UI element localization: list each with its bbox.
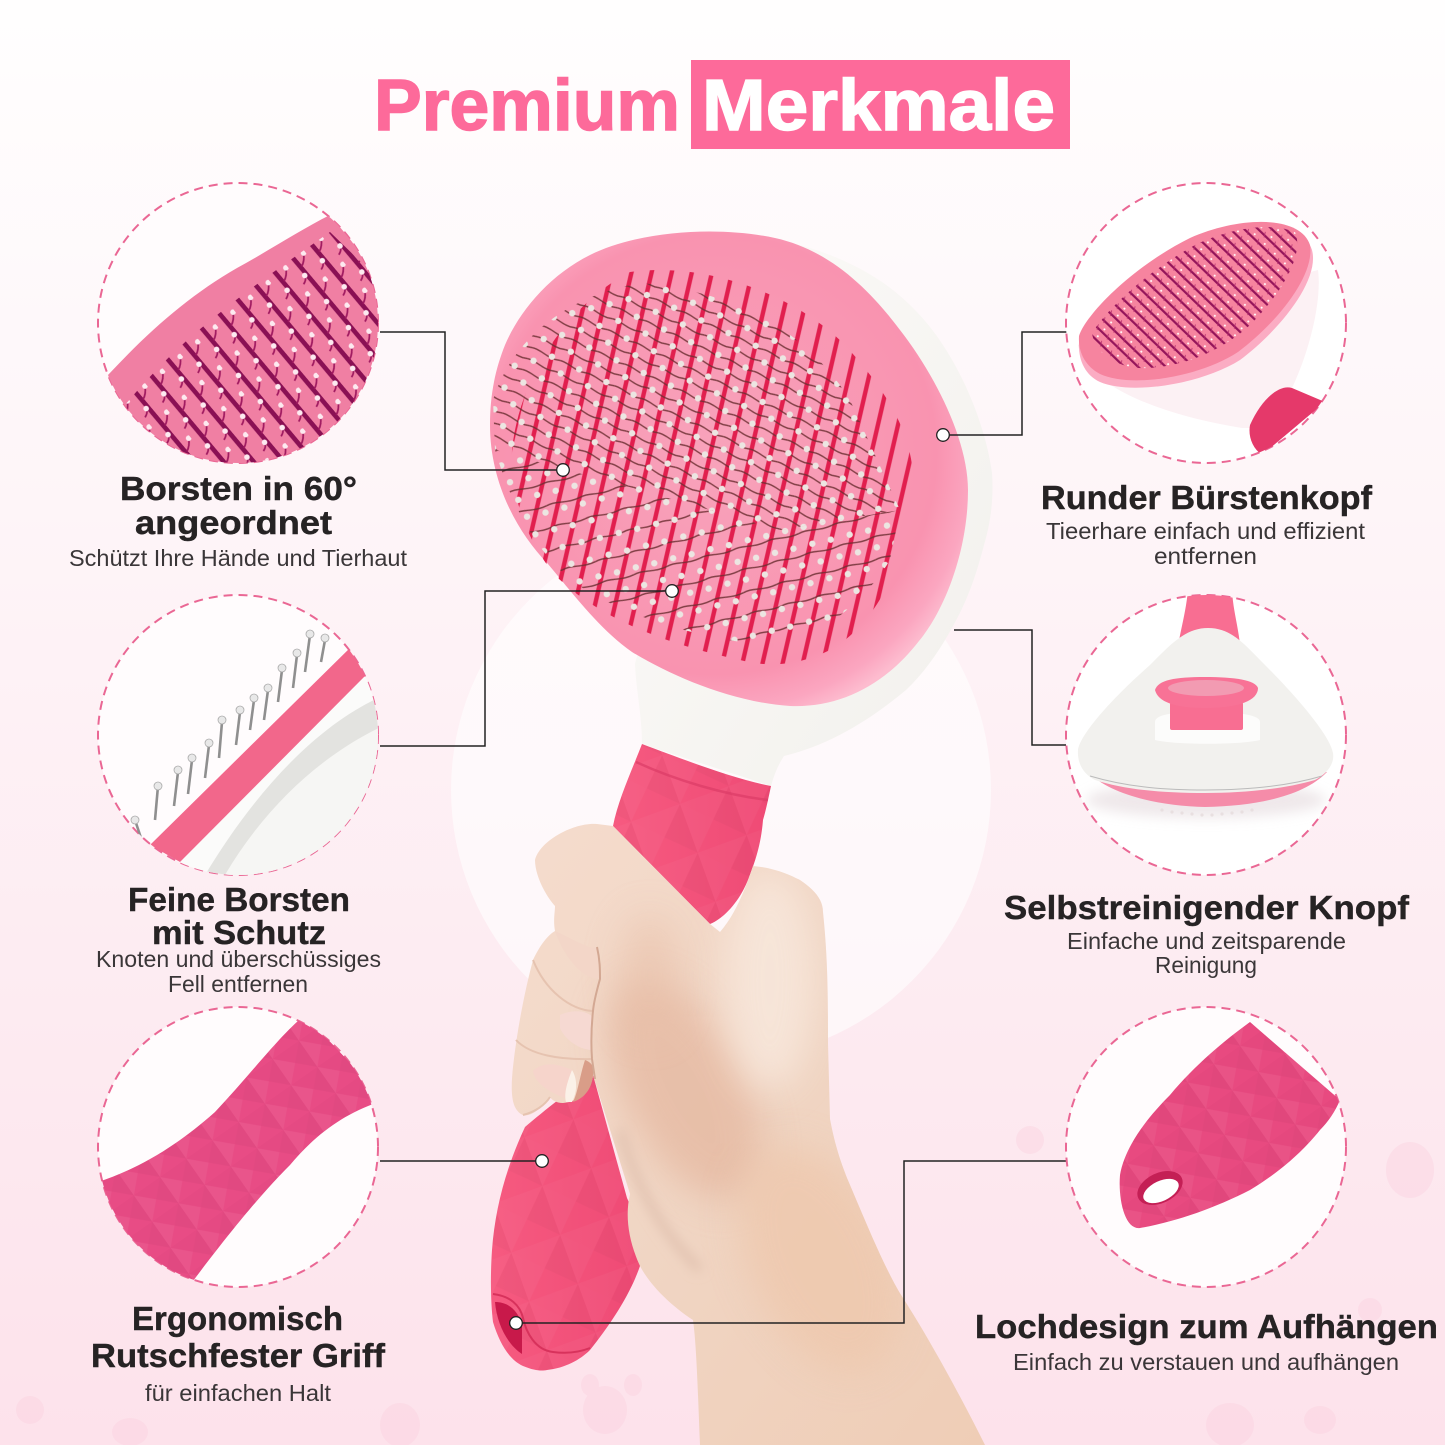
handle end close-up	[1120, 1022, 1340, 1228]
caption: fine bristles: Fell entfernen	[168, 971, 308, 997]
button close-up	[1078, 590, 1333, 818]
caption: round head: Tieerhare einfach und effizient	[1046, 518, 1366, 544]
caption: bristles: Schützt Ihre Hände und Tierhaut	[69, 545, 408, 571]
caption: bristles	[69, 470, 408, 571]
caption: fine bristles: Knoten und überschüssiges	[96, 946, 381, 972]
title	[374, 60, 1070, 149]
paw pattern decorations	[16, 1126, 1434, 1445]
detail circle	[98, 1007, 378, 1287]
connector lines and marker dots	[380, 332, 1086, 1329]
panel: bristles at 60 degrees	[97, 182, 379, 464]
caption: button: Einfache und zeitsparende	[1067, 928, 1346, 954]
red bristle slots	[512, 270, 912, 664]
caption: grip: für einfachen Halt	[145, 1380, 332, 1406]
brush head	[490, 231, 968, 706]
caption: grip: Rutschfester Griff	[91, 1337, 386, 1374]
metal pins lower zone wires	[495, 450, 896, 641]
panel: hanging hole	[1066, 1007, 1346, 1287]
detail circle	[1066, 595, 1346, 875]
caption: grip	[91, 1300, 386, 1406]
bristle close-up	[108, 216, 378, 463]
metal pins lower zone tips	[495, 450, 894, 642]
finger creases and nails	[516, 931, 600, 1115]
caption: round head	[1041, 479, 1373, 569]
caption: fine bristles: mit Schutz	[152, 914, 326, 951]
panel: ergonomic grip	[95, 1007, 385, 1290]
title word: Premium: Premium	[374, 66, 680, 146]
caption: fine bristles: Feine Borsten	[128, 881, 350, 918]
caption: hole	[975, 1308, 1438, 1375]
main product: brush held in hand	[480, 231, 993, 1445]
metal pins upper zone	[493, 284, 898, 530]
detail circle	[1066, 1007, 1346, 1287]
caption: round head: Runder Bürstenkopf	[1041, 479, 1373, 516]
caption: fine bristles	[96, 881, 381, 997]
detail circle	[1066, 183, 1346, 463]
pink collar and upper grip	[613, 744, 771, 924]
caption: grip: Ergonomisch	[132, 1300, 343, 1337]
detail circle	[98, 183, 378, 463]
hand	[512, 824, 985, 1445]
caption: hole: Lochdesign zum Aufhängen	[975, 1308, 1438, 1345]
lower grip	[491, 1075, 640, 1371]
panel: round brush head	[1066, 183, 1346, 463]
caption: button: Reinigung	[1155, 952, 1257, 978]
caption: hole: Einfach zu verstauen und aufhängen	[1013, 1349, 1399, 1375]
caption: button: Selbstreinigender Knopf	[1004, 889, 1410, 926]
brush head close-up	[1078, 222, 1325, 455]
detail circle	[98, 595, 378, 875]
caption: button	[1004, 889, 1410, 978]
panel: fine bristles with protection	[98, 595, 385, 880]
background glow circle	[451, 520, 991, 1060]
caption: bristles: Borsten in 60°	[120, 470, 357, 507]
caption: bristles: angeordnet	[135, 504, 332, 541]
grip close-up	[102, 1021, 372, 1280]
brush white back and neck	[635, 234, 993, 786]
title highlight: Merkmale: Merkmale	[702, 66, 1055, 146]
side view of brush	[131, 630, 385, 880]
panel: self-cleaning button	[1066, 590, 1346, 875]
caption: round head: entfernen	[1154, 543, 1257, 569]
